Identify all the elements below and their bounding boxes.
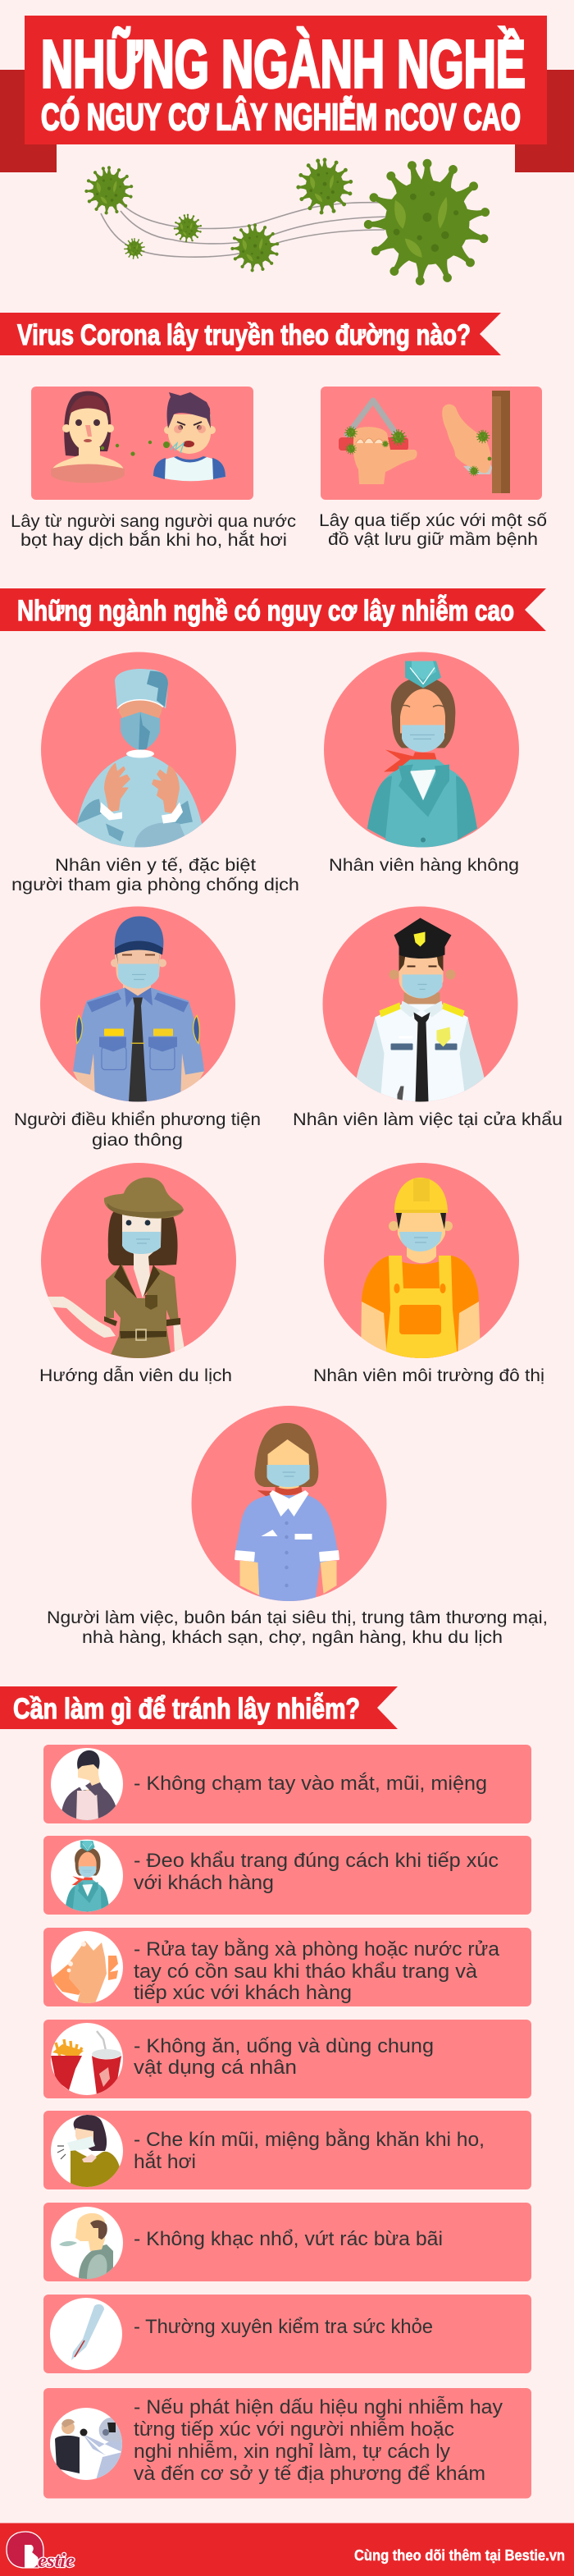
figure: border officer — [323, 906, 518, 1101]
icon: temperature check — [50, 2408, 122, 2480]
icon: coughing woman — [51, 2115, 123, 2187]
tip text — [134, 1938, 499, 2004]
tip card 8 — [43, 2388, 531, 2498]
virus spread illustration — [84, 158, 491, 286]
tip text: - Không chạm tay vào mắt, mũi, miệng — [134, 1773, 487, 1795]
figure: sanitation worker — [324, 1163, 519, 1358]
logo: Bestie: estie — [38, 2551, 75, 2572]
tip text — [134, 2129, 485, 2173]
section heading: prevention — [0, 1686, 398, 1729]
footer bar — [0, 2523, 574, 2576]
tip card 7 — [43, 2295, 531, 2373]
tip text: - Không khạc nhổ, vứt rác bừa bãi — [134, 2228, 443, 2250]
section heading: prevention: Cần làm gì để tránh lây nhiễm? — [13, 1692, 360, 1725]
tip text: nghi nhiễm, xin nghỉ làm, tự cách ly — [134, 2441, 451, 2463]
section heading: transmission: Virus Corona lây truyền theo đường nào? — [17, 319, 471, 351]
figure: flight attendant — [324, 652, 519, 847]
tip text: tay có cồn sau khi tháo khẩu trang và — [134, 1961, 477, 1983]
tip text: - Đeo khẩu trang đúng cách khi tiếp xúc — [134, 1850, 499, 1872]
section heading: transmission — [0, 313, 501, 355]
tip text: tiếp xúc với khách hàng — [134, 1982, 352, 2004]
woman — [51, 391, 125, 483]
caption: droplet transmission — [11, 511, 296, 550]
figure: driver — [40, 906, 235, 1101]
caption: surface transmission — [319, 510, 547, 549]
tip card 5 — [43, 2111, 531, 2189]
droplets — [101, 441, 170, 456]
panel: surface transmission — [321, 387, 542, 500]
caption: tour guide: Hướng dẫn viên du lịch — [39, 1365, 232, 1385]
tip text: - Không ăn, uống và dùng chung — [134, 2035, 434, 2057]
icon: man spitting — [51, 2207, 123, 2279]
caption: driver: giao thông — [92, 1130, 183, 1150]
caption: medical worker: Nhân viên y tế, đặc biệt — [55, 855, 256, 875]
caption: flight attendant: Nhân viên hàng không — [329, 855, 519, 875]
icon: fries and drink — [51, 2023, 123, 2095]
tip text: - Nếu phát hiện dấu hiệu nghi nhiễm hay — [134, 2396, 503, 2418]
door and hand — [442, 391, 510, 493]
caption: surface transmission: Lây qua tiếp xúc với một số — [319, 510, 547, 530]
figure: retail worker — [192, 1406, 387, 1601]
tip card 3 — [43, 1928, 531, 2006]
tip text: từng tiếp xúc với người nhiễm hoặc — [134, 2418, 454, 2441]
tip text: - Thường xuyên kiểm tra sức khỏe — [134, 2316, 433, 2338]
figure: tour guide — [41, 1163, 236, 1358]
caption: medical worker: người tham gia phòng chống dịch — [11, 875, 299, 895]
caption: droplet transmission: bọt hay dịch bắn khi ho, hắt hơi — [20, 529, 287, 550]
figure: medical worker — [41, 652, 236, 847]
caption: retail worker: nhà hàng, khách sạn, chợ, ngân hàng, khu du lịch — [82, 1627, 503, 1647]
tip card 6 — [43, 2203, 531, 2281]
caption: retail worker: Người làm việc, buôn bán tại siêu thị, trung tâm thương mại, — [47, 1608, 548, 1627]
tip text: với khách hàng — [134, 1872, 274, 1894]
tip text — [134, 1850, 499, 1894]
caption: surface transmission: đồ vật lưu giữ mầm bệnh — [328, 529, 538, 549]
tip text — [134, 2396, 503, 2485]
panel: droplet transmission — [31, 387, 253, 500]
logo: Bestie — [7, 2532, 75, 2572]
tip text: vật dụng cá nhân — [134, 2057, 297, 2079]
tip card 4 — [43, 2020, 531, 2098]
hand on handle — [339, 400, 417, 484]
section heading: high risk jobs — [0, 588, 546, 631]
caption: driver — [14, 1110, 261, 1150]
tip card 2 — [43, 1836, 531, 1915]
icon: washing hands — [51, 1931, 123, 2003]
tip text: - Rửa tay bằng xà phòng hoặc nước rửa — [134, 1938, 499, 1961]
title banner — [0, 16, 574, 172]
caption: border officer: Nhân viên làm việc tại cửa khẩu — [293, 1110, 563, 1129]
caption: driver: Người điều khiển phương tiện — [14, 1110, 261, 1129]
caption: sanitation worker: Nhân viên môi trường đô thị — [313, 1366, 544, 1385]
icon: flight attendant with mask — [51, 1840, 123, 1915]
tip text: hắt hơi — [134, 2151, 196, 2173]
man — [153, 392, 226, 481]
icon: thermometer — [50, 2298, 122, 2370]
caption: retail worker — [47, 1608, 548, 1647]
tip card 1 — [43, 1745, 531, 1823]
tip text — [134, 2035, 434, 2079]
tip text: và đến cơ sở y tế địa phương để khám — [134, 2463, 485, 2485]
caption: medical worker — [11, 855, 299, 895]
tip text: - Che kín mũi, miệng bằng khăn khi ho, — [134, 2129, 485, 2151]
icon: man touching face — [51, 1748, 123, 1820]
caption: droplet transmission: Lây từ người sang người qua nước — [11, 511, 296, 531]
